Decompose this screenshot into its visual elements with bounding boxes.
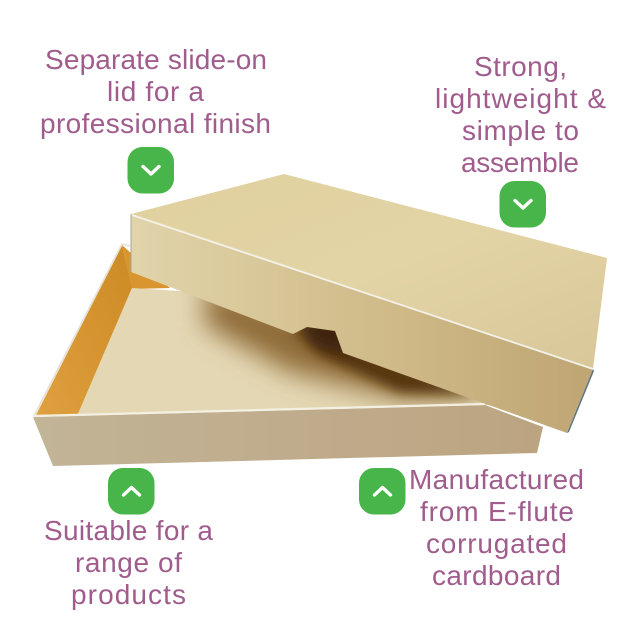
lid: front side with notch	[131, 214, 593, 433]
heading text: cardboard	[432, 560, 561, 591]
heading text: corrugated	[426, 528, 567, 559]
heading text: lid for a	[107, 76, 204, 107]
heading text: range of	[75, 547, 182, 578]
lid: left edge	[130, 214, 132, 272]
heading text: assemble	[461, 147, 579, 178]
heading text	[409, 464, 584, 591]
lid: top face	[131, 174, 607, 369]
heading text: Separate slide-on	[45, 44, 267, 75]
box photo: open cardboard box with lid	[33, 174, 607, 466]
heading text: Manufactured	[409, 464, 584, 495]
heading text: Suitable for a	[44, 515, 213, 546]
box base: left inner orange wall	[36, 245, 132, 415]
callout: separate slide-on lid	[40, 44, 271, 194]
heading text	[44, 515, 213, 610]
heading text: from E-flute	[420, 496, 574, 527]
lid: fold highlight	[132, 215, 593, 369]
box base: front wall	[33, 405, 543, 466]
icon: down chevron button	[128, 147, 174, 194]
icon: up chevron button	[108, 468, 154, 514]
heading text: professional finish	[40, 108, 271, 139]
callout: strong, lightweight	[435, 51, 606, 228]
callout: manufactured from E-flute	[359, 464, 584, 591]
box base: back inner orange wall	[122, 245, 170, 289]
icon: down chevron button	[500, 181, 546, 228]
heading text: products	[71, 579, 186, 610]
heading text: lightweight &	[435, 83, 606, 114]
box base: front top edge highlight	[34, 404, 485, 416]
heading text	[435, 51, 606, 178]
box base: inner floor with lid shadow	[78, 285, 500, 414]
lid: right end dark edge	[567, 369, 594, 433]
box base: white outer rim of left wall	[34, 244, 130, 416]
heading text	[40, 44, 271, 139]
heading text: Strong,	[474, 51, 567, 82]
callout: suitable for a range	[44, 468, 213, 610]
icon: up chevron button	[359, 468, 406, 514]
heading text: simple to	[462, 115, 579, 146]
